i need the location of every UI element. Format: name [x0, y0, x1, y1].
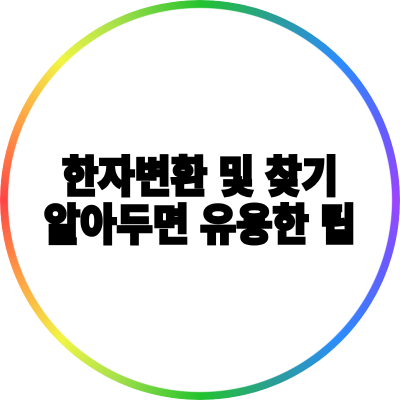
title line 1: 한자변환 및 찾기 [62, 154, 338, 202]
title line 2: 알아두면 유용한 팁 [44, 202, 356, 250]
